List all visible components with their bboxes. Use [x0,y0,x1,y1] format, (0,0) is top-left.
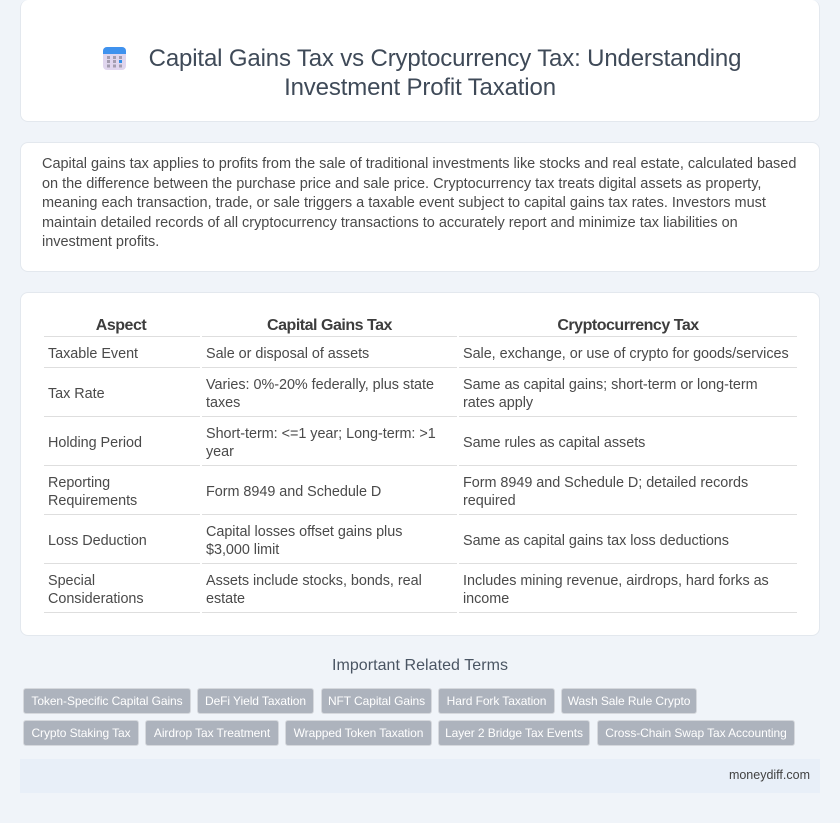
table header: Aspect [96,317,146,334]
table header [96,317,699,334]
row: tax rate [48,377,758,411]
row: taxable event [48,346,789,362]
row: tax rate: rates apply [463,395,533,411]
row: loss deduction [48,524,729,558]
text block: introduction: maintain detailed records of all cryptocurrency transactions to accurately report and minimize tax liabilities on [42,215,738,231]
footer source: moneydiff.com [729,768,810,782]
row: reporting requirements: Requirements [48,493,137,509]
tags: related terms: DeFi Yield Taxation [205,694,306,708]
icon: calendar [103,47,126,70]
row: reporting requirements: Form 8949 and Schedule D; detailed records [463,475,748,491]
tags: related terms: Token-Specific Capital Gains [31,694,183,708]
tags: related terms: Crypto Staking Tax [31,726,131,740]
tags: related terms: NFT Capital Gains [328,694,425,708]
tags: related terms [23,688,795,746]
text block: introduction: meaning each transaction, trade, or sale triggers a taxable event subject to capital gains tax rates. Investors must [42,195,766,211]
row: tax rate: Varies: 0%-20% federally, plus state [206,377,434,393]
text block: introduction: on the difference between the purchase price and sale price. Cryptocurrency tax treats digital assets as property, [42,176,761,192]
row: reporting requirements: Reporting [48,475,110,491]
row: special considerations: Special [48,573,95,589]
title: Capital Gains Tax vs Cryptocurrency Tax: Understanding [149,45,741,72]
row: tax rate: taxes [206,395,240,411]
row: holding period [48,426,645,460]
row: loss deduction: Loss Deduction [48,533,147,549]
text block: introduction: Capital gains tax applies to profits from the sale of traditional investments like stocks and real estate, calculated based [42,156,796,172]
row: tax rate: Same as capital gains; short-term or long-term [463,377,758,393]
row: reporting requirements: required [463,493,516,509]
text block: introduction [42,156,796,250]
row: holding period: year [206,444,234,460]
row: special considerations: estate [206,591,245,607]
row: reporting requirements: Form 8949 and Schedule D [206,484,381,500]
tags: related terms: Cross-Chain Swap Tax Accounting [605,726,787,740]
row: special considerations: Assets include stocks, bonds, real [206,573,422,589]
tags: related terms: Hard Fork Taxation [447,694,546,708]
row: special considerations: income [463,591,509,607]
heading: important related terms: Important Related Terms [332,657,508,674]
row: special considerations [48,573,769,607]
table header: Capital Gains Tax [267,317,392,334]
tags: related terms: Layer 2 Bridge Tax Events [445,726,583,740]
panel: title header [20,0,820,122]
table header: Cryptocurrency Tax [557,317,699,334]
row: taxable event: Sale, exchange, or use of crypto for goods/services [463,346,789,362]
row: taxable event: Taxable Event [48,346,138,362]
row: taxable event: Sale or disposal of assets [206,346,369,362]
row: loss deduction: Same as capital gains tax loss deductions [463,533,729,549]
row: loss deduction: $3,000 limit [206,542,279,558]
title [149,45,741,101]
panel: introduction [20,142,820,272]
row: special considerations: Includes mining revenue, airdrops, hard forks as [463,573,769,589]
row: tax rate: Tax Rate [48,386,105,402]
row: reporting requirements [48,475,748,509]
text block: introduction: investment profits. [42,234,159,250]
row: special considerations: Considerations [48,591,144,607]
tags: related terms: Airdrop Tax Treatment [154,726,270,740]
row: holding period: Short-term: <=1 year; Long-term: >1 [206,426,436,442]
tags: related terms: Wash Sale Rule Crypto [568,694,690,708]
footer bar [20,759,820,793]
tags: related terms: Wrapped Token Taxation [294,726,423,740]
row: holding period: Holding Period [48,435,142,451]
row: holding period: Same rules as capital assets [463,435,645,451]
panel: comparison table [20,292,820,636]
title: Investment Profit Taxation [284,74,556,101]
row: loss deduction: Capital losses offset gains plus [206,524,402,540]
